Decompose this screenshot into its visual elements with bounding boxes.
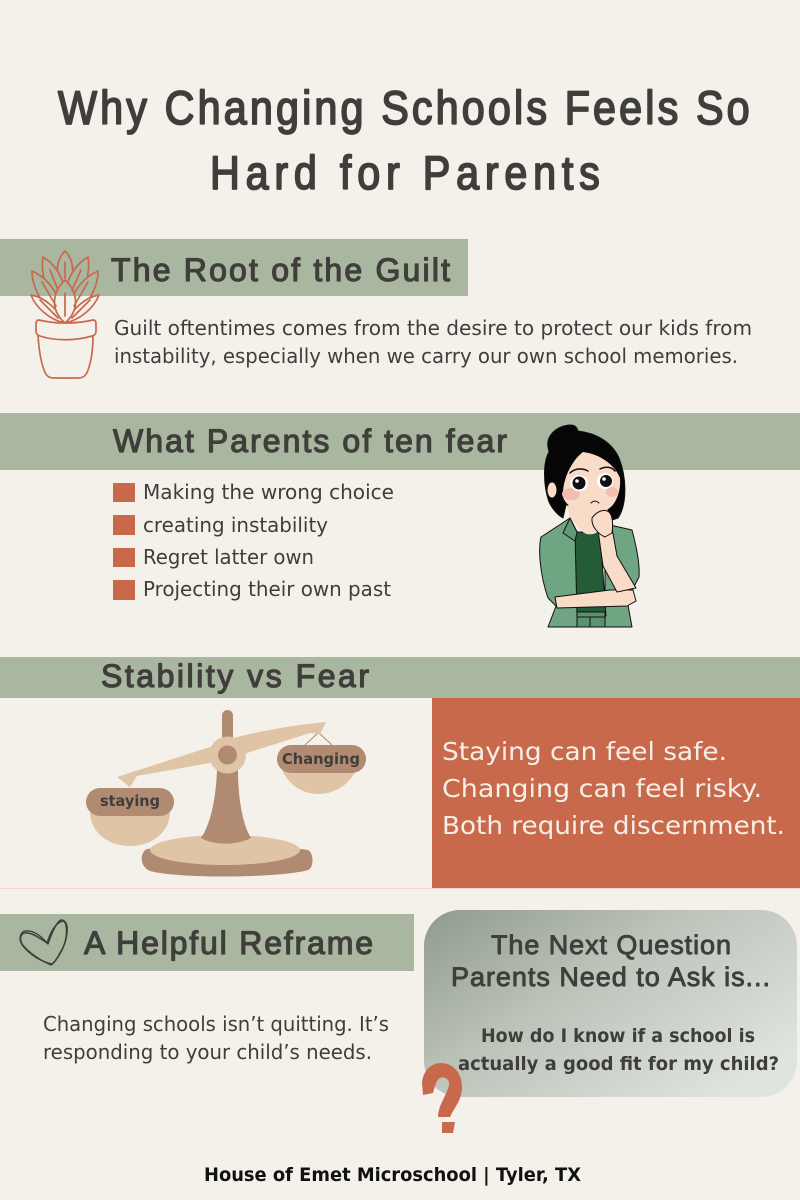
callout: stability versus fear statements: Changing can feel risky. [442, 774, 762, 803]
text: the question: How do I know if a school is [481, 1025, 755, 1047]
list of fears: Projecting their own past [143, 577, 391, 601]
heading: stability vs fear: Stability vs Fear [101, 658, 369, 694]
panel: what parents often fear [0, 413, 800, 627]
title: Hard for Parents [210, 148, 600, 200]
panel: the next question [422, 910, 797, 1133]
illustration: balance scale: Changing [282, 750, 360, 768]
illustration: balance scale: staying [100, 792, 160, 810]
text: guilt explanation: instability, especially when we carry our own school memories. [114, 344, 738, 368]
list of fears: Making the wrong choice [143, 480, 394, 504]
text: guilt explanation [114, 316, 752, 368]
icon: question mark [422, 1063, 462, 1133]
list of fears: Regret latter own [143, 545, 314, 569]
heading: a helpful reframe: A Helpful Reframe [84, 925, 373, 961]
illustration: thinking woman [540, 425, 639, 627]
callout: stability versus fear statements: Staying can feel safe. [442, 737, 727, 766]
title: Why Changing Schools Feels So [58, 83, 750, 135]
heading band: root of the guilt [0, 239, 468, 296]
icon: sketched heart [20, 920, 67, 965]
text: reframe explanation: Changing schools isn’t quitting. It’s [43, 1012, 389, 1036]
footer: House of Emet Microschool | Tyler, TX [204, 1164, 581, 1186]
text: the question: actually a good fit for my child? [458, 1053, 779, 1075]
heading: what parents often fear: What Parents of ten fear [113, 423, 507, 459]
heading: the next question: Parents Need to Ask is... [451, 962, 770, 992]
panel: a helpful reframe [0, 914, 414, 1064]
heading: the root of the guilt: The Root of the Guilt [111, 252, 450, 288]
panel: the root of the guilt [0, 239, 752, 378]
list of fears [113, 480, 394, 601]
heading: the next question: The Next Question [491, 930, 731, 960]
text: guilt explanation: Guilt oftentimes comes from the desire to protect our kids from [114, 316, 752, 340]
title [58, 83, 750, 200]
callout: stability versus fear statements [432, 698, 800, 888]
callout: stability versus fear statements: Both require discernment. [442, 811, 785, 840]
icon: potted plant [31, 251, 99, 378]
illustration: balance scale [86, 710, 366, 877]
heading band: helpful reframe [0, 914, 414, 971]
heading band: stability vs fear [0, 657, 800, 698]
heading band: what parents fear [0, 413, 800, 470]
panel: stability vs fear [0, 657, 800, 888]
text: the question [458, 1025, 779, 1075]
text: reframe explanation [43, 1012, 389, 1064]
list of fears: creating instability [143, 513, 328, 537]
text: reframe explanation: responding to your child’s needs. [43, 1040, 372, 1064]
heading: the next question [451, 930, 770, 992]
card background [424, 910, 797, 1097]
